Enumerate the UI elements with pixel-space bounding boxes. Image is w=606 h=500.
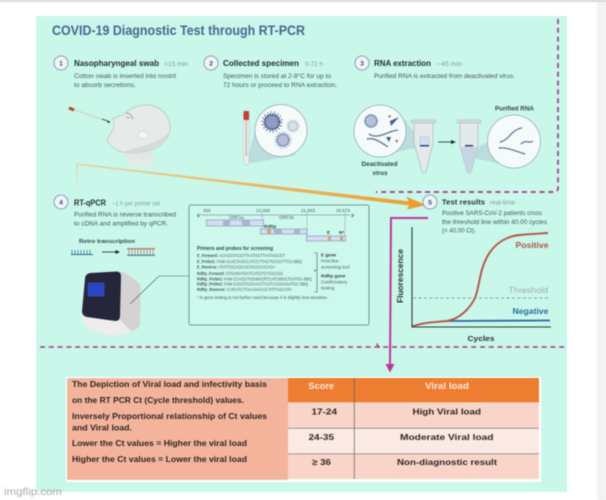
- genome map: 29,674: [336, 208, 350, 213]
- gene brackets and labels: E gene: [321, 252, 337, 258]
- step 2: collected specimen text: 72 hours or proceed to RNA extraction.: [223, 83, 337, 89]
- retro transcription diagram: [71, 239, 155, 255]
- gene brackets and labels: RdRp gene: [321, 274, 346, 278]
- step 5: test results text: Positive SARS-CoV-2 patients cross: [442, 211, 542, 217]
- retro transcription diagram: Retro transcription: [79, 239, 135, 245]
- primer list: RdRp_Reverse: CARATGTTAAASACACTATTAGCATA: [197, 287, 293, 292]
- panel: primers and probes: [189, 205, 369, 325]
- icon: deactivated virus magnifier: virus: [372, 171, 388, 177]
- step 4: RT-qPCR text: [54, 195, 176, 228]
- step 4: RT-qPCR text: to cDNA and amplified by qPCR.: [74, 222, 168, 228]
- primer list: RdRp_Probe1: FAM-CCAGGTGGWACRTCATCMGGTGATGC-BBQ: [197, 276, 312, 282]
- genome map: 13,468: [256, 208, 270, 213]
- arrow: orange from step 1 to step 5: [77, 163, 426, 210]
- table: score and viral load: Moderate Viral load: [400, 432, 494, 442]
- step 4: RT-qPCR text: ~1 h per primer set: [112, 200, 160, 208]
- icon: head with swab: [69, 105, 170, 170]
- positive curve: [412, 233, 548, 326]
- panel: viral load explanation: Higher the Ct values = Lower the viral load: [72, 455, 247, 464]
- title: COVID-19 Diagnostic Test through RT-PCR: [52, 23, 305, 38]
- table: score and viral load: High Viral load: [412, 406, 481, 416]
- step 2: collected specimen text: Collected specimen: [223, 59, 299, 68]
- step 1: nasopharyngeal swab text: 1: [59, 60, 63, 68]
- step 1: nasopharyngeal swab text: to absorb secretions.: [74, 83, 136, 89]
- step 1: nasopharyngeal swab text: Cotton swab is inserted into nostril: [74, 74, 176, 80]
- arrow: tube to tube: [438, 140, 456, 144]
- table: score and viral load: Viral load: [425, 381, 469, 391]
- step 5: test results text: the threshold line within 40.00 cycles: [442, 220, 547, 226]
- step 4: RT-qPCR text: Purified RNA is reverse transcribed: [74, 212, 176, 218]
- panel: viral load explanation: Lower the Ct values = Higher the viral load: [72, 439, 247, 448]
- genome map: 21,563: [301, 208, 315, 213]
- panel: viral load explanation: [66, 377, 289, 482]
- table: score and viral load: 17-24: [312, 406, 337, 416]
- threshold line: [413, 297, 550, 299]
- primer list: E_Reverse: ATATTGCAGCAGTACGCACACA: [197, 264, 276, 270]
- icon: tube with purified RNA: [457, 120, 510, 174]
- step 2: collected specimen text: 0-72 h: [305, 61, 323, 68]
- arrow: magenta connector to table: [386, 218, 428, 372]
- step 2: collected specimen text: [204, 56, 337, 89]
- axes: [412, 227, 551, 327]
- step 2: collected specimen text: 2: [209, 60, 213, 68]
- genome map: N*: [339, 230, 344, 235]
- primer list: * N gene testing is not further used because it is slightly less sensitive.: [197, 295, 328, 300]
- step 5: test results text: [423, 195, 547, 234]
- gene brackets and labels: screening tool: [321, 264, 350, 270]
- watermark: imgflip.com: [4, 487, 62, 498]
- icon: qPCR machine: [82, 272, 140, 335]
- panel: viral load explanation: The Depiction of Viral load and infectivity basis: [72, 380, 267, 389]
- panel: viral load explanation: and Viral load.: [72, 424, 132, 432]
- chart: fluorescence curve: Cycles: [468, 334, 494, 343]
- genome map: ORF1b: [279, 215, 294, 220]
- gene brackets and labels: First-line: [321, 258, 339, 264]
- gene brackets and labels: [314, 252, 350, 292]
- primer list: RdRp_Forward: GTGARATGGTCATGTGTGGCGG: [197, 271, 283, 276]
- step 1: nasopharyngeal swab text: <15 min: [164, 61, 188, 68]
- genome map: 266: [203, 208, 211, 213]
- step 5: test results text: Test results: [442, 198, 485, 206]
- chart: fluorescence curve: Positive: [516, 240, 549, 250]
- dashed divider: middle: [40, 344, 566, 347]
- chart: fluorescence curve: [396, 227, 551, 343]
- genome map: ORF1a: [229, 215, 244, 220]
- step 3: RNA extraction text: RNA extraction: [374, 59, 431, 68]
- primer list: Primers and probes for screening: [197, 246, 273, 252]
- genome map: E: [327, 230, 330, 235]
- step 4: RT-qPCR text: RT-qPCR: [74, 198, 106, 208]
- table: score and viral load: Non-diagnostic result: [397, 457, 497, 467]
- step 2: collected specimen text: Specimen is stored at 2-8°C for up to: [223, 74, 332, 80]
- step 5: test results text: 5: [428, 200, 432, 206]
- genome map: 3': [351, 213, 355, 218]
- chart: fluorescence curve: Threshold: [508, 285, 548, 295]
- icon: tube with sample: [411, 120, 436, 174]
- step 5: test results text: real-time: [490, 200, 515, 206]
- gene brackets and labels: testing: [321, 286, 335, 290]
- genome map: RdRp: [264, 224, 276, 229]
- leader line from machine to primer panel: [130, 276, 189, 304]
- table: score and viral load: Score: [308, 381, 334, 391]
- primer list: [197, 246, 328, 300]
- icon: deactivated virus magnifier: [354, 105, 421, 177]
- genome map: [197, 208, 355, 241]
- icon: specimen tube and virus magnifier: [244, 104, 307, 165]
- negative curve: [447, 320, 550, 322]
- chart: fluorescence curve: Fluorescence: [396, 248, 405, 303]
- panel: viral load explanation: on the RT PCR Ct (Cycle threshold) values.: [72, 396, 244, 405]
- primer list: E_Forward: ACAGGTACGTTAATAGTTAATAGCGT: [197, 253, 285, 258]
- step 1: nasopharyngeal swab text: Nasopharyngeal swab: [74, 59, 159, 68]
- table: score and viral load: [288, 377, 541, 482]
- genome map: 5': [197, 213, 201, 218]
- chart: fluorescence curve: Negative: [512, 307, 549, 316]
- icon: deactivated virus magnifier: Deactivated: [362, 162, 398, 168]
- table: score and viral load: ≥ 36: [312, 457, 331, 467]
- gene brackets and labels: Confirmatory: [321, 280, 348, 284]
- step 3: RNA extraction text: 3: [360, 60, 364, 68]
- step 3: RNA extraction text: Purified RNA is extracted from deactivated virus.: [374, 74, 515, 80]
- icon: purified RNA magnifier: [488, 106, 540, 168]
- icon: purified RNA magnifier: Purified RNA: [495, 106, 535, 112]
- panel: viral load explanation: Inversely Proportional relationship of Ct values: [72, 412, 267, 421]
- step 4: RT-qPCR text: 4: [59, 200, 63, 206]
- step 5: test results text: (< 40.00 Ct).: [442, 228, 476, 234]
- step 3: RNA extraction text: [355, 56, 515, 80]
- step 3: RNA extraction text: ~45 min: [437, 61, 462, 68]
- dashed divider: upper right: [376, 19, 558, 192]
- table: score and viral load: 24-35: [308, 432, 334, 442]
- primer list: RdRp_Probe2: FAM-CAGGTGGAACCTCATCAGGAGATGC-BBQ: [197, 282, 308, 286]
- primer list: E_Probe1: FAM-ACACTAGCCATCCTTACTGCGCTTCG-BBQ: [197, 259, 302, 264]
- step 1: nasopharyngeal swab text: [54, 56, 188, 89]
